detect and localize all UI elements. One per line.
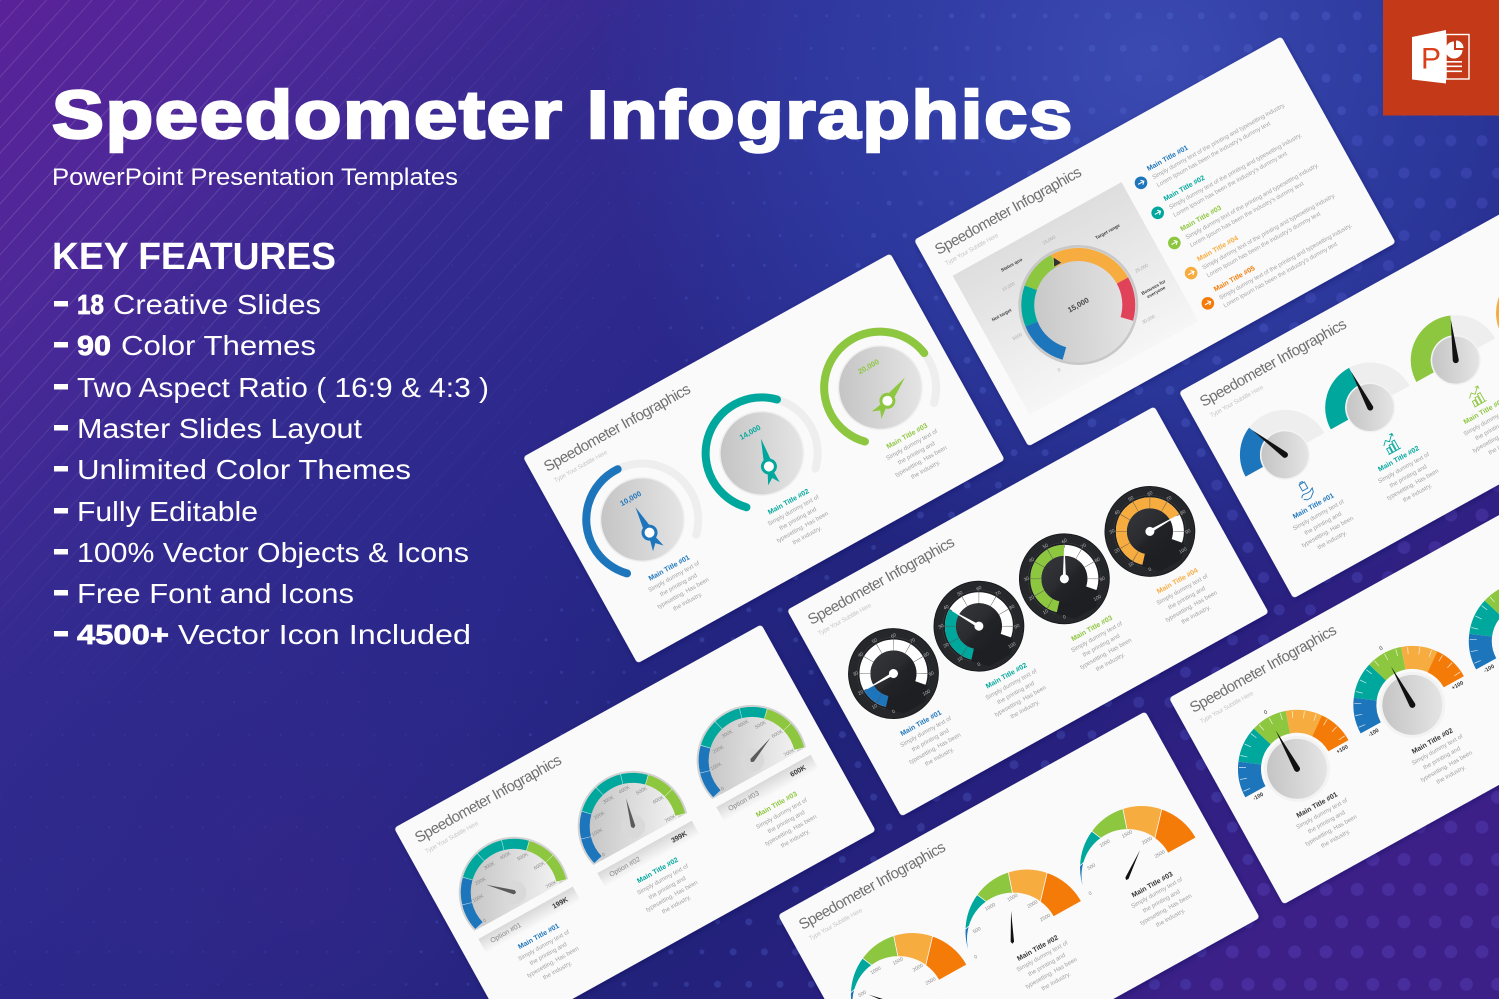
gauge 2 caption (631, 854, 704, 922)
dial 1: 60 (890, 632, 898, 640)
gauge 1 caption (1290, 788, 1363, 856)
gauge scale labels: 5000 (1012, 332, 1023, 341)
gauge 3 caption: the industry. (1155, 908, 1187, 929)
gauge 2 caption: Simply dummy text of (767, 494, 820, 528)
gauge 3: 400K (737, 718, 751, 730)
gauge 2: 1500 (1006, 893, 1019, 903)
gauge 2: 100K (591, 827, 604, 838)
gauge scale labels: Status quo (1000, 257, 1023, 273)
gauge 3 caption: typesetting. Has been (1139, 893, 1193, 927)
dial 3: 80 (1094, 556, 1102, 564)
dial 4: 80 (1179, 509, 1187, 517)
gauge 2 caption (1406, 724, 1478, 792)
gauge 3 caption: Simply dummy text of (755, 798, 809, 831)
dial 1 caption: the printing and (911, 728, 950, 753)
icon: powerpoint logo: P (1421, 42, 1441, 76)
feature: free font: Free Font and Icons (77, 578, 354, 609)
gauge 1 (1236, 404, 1333, 502)
dial 3: 10 (1042, 608, 1050, 616)
dial 1 caption (894, 707, 967, 774)
gauge 2: 14,000 (738, 423, 762, 442)
feature: unlimited colors: Unlimited Color Themes (77, 454, 411, 485)
dial 2: 80 (1008, 604, 1016, 612)
gauge 1 caption (1287, 489, 1359, 557)
gauge 1 caption: the printing and (529, 942, 568, 967)
gauge 3: 0 (1088, 890, 1093, 897)
dial 4 caption: Main Title #04 (1156, 567, 1199, 596)
feature: 18 creative slides: Creative Slides (113, 289, 321, 320)
dial 1 caption: Simply dummy text of (900, 716, 953, 749)
dial 1 caption: typesetting. Has been (908, 732, 962, 766)
gauge 2 caption: Simply dummy text of (1377, 452, 1431, 485)
dial 3: 20 (1028, 594, 1036, 602)
gauge 2 caption: Simply dummy text of (1411, 734, 1464, 767)
slide heading: Speedometer Infographics (796, 839, 949, 934)
gauge 3 caption: the industry. (910, 460, 942, 481)
gauge 2: -100 (1368, 728, 1380, 738)
gauge 3 caption (1125, 868, 1198, 935)
gauge 3 (1468, 589, 1499, 672)
gauge 1 caption: Main Title #01 (1296, 791, 1339, 820)
gauge 1: 100K (472, 893, 485, 904)
gauge scale labels: 30,000 (1141, 314, 1156, 325)
gauge 1 caption: the printing and (1307, 810, 1346, 835)
dial 3: 100 (1093, 594, 1103, 603)
gauge 1: 500 (857, 989, 868, 999)
panel: slide with fan gauges and icons, right (1179, 188, 1499, 598)
gauge 2 (1353, 646, 1464, 736)
dial 2 caption: typesetting. Has been (994, 685, 1048, 718)
gauge 2 caption: typesetting. Has been (1420, 750, 1474, 784)
powerpoint badge (1383, 0, 1499, 116)
dial 2 caption: Main Title #02 (985, 662, 1028, 690)
gauge scale labels: Not target (991, 307, 1013, 322)
dial 4: 70 (1165, 495, 1173, 503)
gauge 2 caption: typesetting. Has been (645, 880, 699, 913)
gauge 3 (1057, 783, 1198, 902)
gauge 3: Option #03 (727, 790, 761, 813)
gauge 2: 500 (972, 926, 982, 935)
gauge 3 caption: Simply dummy text of (1131, 877, 1184, 910)
gauge 1: 400K (499, 850, 513, 862)
gauge 2: 2000 (1026, 899, 1039, 910)
gauge scale labels: Target range (1094, 223, 1121, 240)
gauge 3: 100K (710, 761, 723, 772)
key features heading: KEY FEATURES (52, 236, 336, 278)
dial 2: 10 (956, 656, 964, 664)
icon: bar chart with arrow (1380, 433, 1401, 455)
dial 4 (1089, 470, 1211, 593)
dial 4: 50 (1127, 495, 1135, 503)
gauge 3 caption: the printing and (767, 810, 806, 835)
gauge 2 caption: Main Title #02 (1016, 935, 1060, 963)
gauge 3 (772, 280, 988, 495)
dial 1: 20 (857, 689, 865, 697)
gauge 2: 0 (601, 852, 607, 858)
gauge 3 caption: Main Title #03 (1131, 871, 1174, 899)
dial 4: 30 (1108, 528, 1116, 536)
dial 4 caption: Simply dummy text of (1156, 574, 1209, 607)
dial 3: 30 (1023, 575, 1031, 583)
slide subtitle: Type Your Subtitle Here (944, 232, 1000, 267)
list item 1: Main Title #01 (1146, 145, 1190, 173)
gauge 3 caption: Main Title #03 (755, 791, 799, 819)
gauge 3 caption: typesetting. Has been (895, 445, 948, 479)
gauge 3: 2500 (1154, 849, 1166, 860)
gauge 2 caption: the printing and (1028, 953, 1067, 978)
gauge 2 caption: the industry. (792, 525, 823, 546)
panel: slide with semicircle dials, bottom left (394, 624, 876, 999)
gauge scale labels: 0 (1057, 367, 1062, 373)
gauge 2: 500K (635, 785, 649, 797)
dial 3 caption: Main Title #03 (1070, 615, 1114, 643)
list item 3: Main Title #03 (1179, 205, 1223, 233)
gauge 1: 0 (482, 918, 488, 924)
gauge 3: 700K (783, 747, 796, 759)
dial 4: 90 (1184, 528, 1192, 536)
dial 4: 0 (1148, 566, 1153, 573)
list item 1: Simply dummy text of the printing and typesetting industry. (1152, 102, 1287, 181)
gauge 2 caption: Simply dummy text of (1016, 940, 1069, 974)
gauge 2 caption: Simply dummy text of (636, 863, 690, 897)
slide heading: Speedometer Infographics (541, 381, 694, 476)
feature: master slides: Master Slides Layout (77, 413, 362, 444)
gauge 2: 0 (1379, 646, 1384, 652)
gauge 1 caption: the industry. (542, 960, 574, 981)
key features list (54, 289, 489, 650)
gauge 2 (654, 346, 869, 561)
gauge 1: 300K (483, 860, 497, 872)
dial 4: 100 (1178, 546, 1188, 556)
dial 4: 20 (1114, 547, 1121, 555)
gauge 1: 10,000 (618, 489, 643, 508)
slide subtitle: Type Your Subtitle Here (817, 602, 873, 637)
gauge 1: 2500 (925, 976, 937, 987)
gauge 2 caption: typesetting. Has been (1025, 957, 1079, 990)
gauge 1 (828, 910, 969, 999)
gauge 1: 199K (551, 896, 570, 911)
list item 5: Simply dummy text of the printing and typesetting industry. (1218, 223, 1354, 302)
list item 4: Simply dummy text of the printing and typesetting industry. (1202, 193, 1337, 271)
list item 3: Simply dummy text of the printing and typesetting industry. (1185, 163, 1320, 241)
dial 3 caption: typesetting. Has been (1079, 638, 1133, 671)
gauge 2: 1000 (984, 902, 997, 913)
gauge 1 caption: Simply dummy text of (1292, 499, 1346, 532)
gauge 1 caption: typesetting. Has been (1305, 814, 1358, 848)
dial 3: 50 (1042, 542, 1050, 550)
dial 3: 40 (1028, 556, 1036, 564)
list item 4 (1180, 184, 1341, 288)
dial 4 caption: the industry. (1181, 605, 1212, 626)
gauge 3 caption (750, 788, 823, 856)
gauge 3 caption: the printing and (1142, 889, 1181, 914)
list item 2: Simply dummy text of the printing and typesetting industry. (1168, 132, 1304, 211)
list item 4: Lorem Ipsum has been the industry's dummy text (1206, 211, 1322, 279)
dial 2: 60 (975, 585, 983, 593)
dial 3 caption (1065, 612, 1138, 679)
gauge 1 (1238, 710, 1348, 800)
dial 2: 30 (937, 623, 945, 631)
dial 1: 0 (891, 709, 897, 715)
feature: aspect ratio: Two Aspect Ratio ( 16:9 & 4:3 ) (77, 372, 489, 403)
panel: slide with crescent gauges, bottom centre (778, 711, 1260, 999)
slide heading: Speedometer Infographics (1197, 316, 1350, 411)
slide subtitle: Type Your Subtitle Here (1199, 690, 1255, 725)
gauge 1 caption: Main Title #01 (648, 554, 691, 583)
gauge 1 caption: the printing and (659, 573, 698, 598)
gauge 1: 200K (474, 876, 488, 887)
gauge 1 caption: Simply dummy text of (648, 561, 701, 594)
dial 4: 40 (1113, 509, 1121, 517)
dial 2: 40 (942, 604, 950, 612)
gauge 2: 0 (973, 954, 979, 961)
subtitle: PowerPoint Presentation Templates (52, 164, 458, 191)
gauge 1 (458, 836, 578, 950)
gauge 3: 500 (1087, 862, 1097, 872)
gauge 2: 200K (593, 810, 607, 821)
gauge 3: 0 (720, 786, 726, 793)
gauge 1 caption (512, 920, 585, 988)
dial 4: 60 (1146, 490, 1154, 498)
gauge 2: 600K (652, 794, 666, 806)
gauge 1 caption: typesetting. Has been (526, 946, 580, 979)
dial 3 caption: the industry. (1095, 652, 1127, 673)
dial 1: 100 (922, 688, 932, 698)
dial 2 caption: the printing and (997, 681, 1036, 706)
slide subtitle: Type Your Subtitle Here (808, 907, 864, 942)
gauge 1 (535, 412, 750, 627)
panel: slide with dark dial gauges (787, 406, 1269, 816)
feature: vector icons: Vector Icon Included (178, 619, 471, 650)
gauge 2 caption: the industry. (1402, 483, 1434, 504)
panel: slide with multi-colour half gauges, right (1169, 494, 1499, 904)
slide heading: Speedometer Infographics (412, 752, 565, 847)
gauge 2 caption (1372, 442, 1445, 510)
feature: vector objects: 100% Vector Objects & Icons (77, 537, 469, 568)
dial 2: 20 (943, 642, 950, 650)
gauge 3: 600K (789, 765, 807, 779)
dial 3 (1003, 518, 1126, 640)
gauge 1: -100 (1252, 792, 1265, 802)
gauge 1 caption: the printing and (1304, 511, 1343, 537)
gauge 2 caption (1011, 932, 1083, 999)
dial 2 caption: Simply dummy text of (985, 668, 1038, 702)
dial 1: 90 (928, 670, 936, 678)
gauge 3: 20,000 (856, 357, 881, 376)
gauge 2 (1320, 355, 1418, 455)
feature: fully editable: Fully Editable (77, 496, 258, 527)
gauge 2 caption: the industry. (1041, 971, 1072, 992)
slide heading: Speedometer Infographics (932, 164, 1085, 259)
icon: hand holding box (1295, 479, 1316, 502)
gauge 2 caption: Main Title #02 (1377, 445, 1421, 473)
gauge 3: 1500 (1121, 829, 1134, 840)
gauge 2: 300K (602, 794, 616, 806)
gauge 2 caption: the printing and (648, 876, 687, 901)
gauge 1 caption: the industry. (1317, 530, 1348, 551)
gauge 2 caption (762, 485, 834, 553)
gauge 2 caption: the printing and (779, 507, 818, 532)
gauge 3 caption: Main Title #03 (886, 422, 929, 451)
panel: slide with large gauge and list, top right (914, 36, 1396, 446)
gauge 3 caption (880, 419, 953, 487)
gauge 1: 500K (516, 851, 530, 863)
gauge 3 caption (1457, 395, 1499, 463)
gauge 1 caption: the industry. (673, 592, 704, 613)
list item 3 (1163, 153, 1325, 258)
gauge scale labels: everyone (1146, 285, 1167, 299)
feature: 90 color themes: 90 (77, 330, 111, 361)
dial 4 caption: typesetting. Has been (1165, 590, 1219, 624)
dial 2 caption: the industry. (1010, 699, 1041, 720)
slide subtitle: Type Your Subtitle Here (553, 449, 609, 484)
dial 2: 0 (977, 661, 982, 668)
gauge 2: 700K (664, 813, 677, 825)
gauge 1: 1000 (870, 965, 882, 976)
gauge 3 caption: typesetting. Has been (764, 814, 818, 848)
dial 2 (918, 565, 1040, 687)
gauge 2 (943, 847, 1084, 965)
gauge 1: 2000 (912, 963, 925, 973)
main title: Speedometer Infographics (52, 77, 1074, 153)
panel: slide with round arc gauges (518, 251, 1009, 666)
list item 5: Lorem Ipsum has been the industry's dummy text (1223, 241, 1339, 309)
feature: 90 color themes (54, 330, 316, 361)
gauge 3: -100 (1483, 664, 1496, 674)
gauge 3 (1406, 309, 1499, 408)
gauge 3 caption: Simply dummy text of (886, 429, 939, 462)
dial 2: 90 (1013, 623, 1021, 631)
dial 2: 50 (956, 590, 964, 598)
gauge 1 caption: the industry. (1320, 829, 1352, 850)
gauge 1: +100 (1336, 744, 1349, 756)
gauge scale labels: Bonuses for (1141, 279, 1167, 296)
gauge 3: 500K (754, 719, 768, 731)
gauge 2: Option #02 (608, 856, 642, 879)
gauge 1 caption: typesetting. Has been (657, 577, 710, 611)
gauge scale labels (970, 198, 1179, 389)
gauge 1 caption: Simply dummy text of (518, 929, 571, 963)
list item 5 (1197, 214, 1358, 319)
dial 1: 30 (852, 670, 860, 678)
gauge 3: 200K (712, 744, 726, 755)
dial 1 (832, 612, 955, 735)
list item 1 (1130, 93, 1291, 198)
gauge 3: 1000 (1099, 838, 1112, 849)
dial 1 caption: the industry. (924, 747, 956, 768)
feature: 90 color themes: Color Themes (121, 330, 316, 361)
dial 1: 70 (909, 637, 917, 645)
large gauge: 15,000 (1066, 295, 1091, 314)
gauge 1 caption: Main Title #01 (1292, 492, 1335, 521)
gauge 1 caption (642, 551, 715, 619)
gauge 2: +100 (1451, 680, 1465, 692)
dial 3: 90 (1099, 575, 1107, 583)
large gauge (981, 208, 1175, 402)
gauge 1: 600K (533, 860, 547, 872)
gauge 3 caption: the printing and (897, 441, 936, 466)
dial 4: 10 (1127, 561, 1135, 569)
gauge 2 caption: Main Title #02 (767, 488, 811, 516)
list item 2 (1147, 123, 1308, 228)
gauge scale labels: 25,000 (1134, 262, 1149, 274)
dial 3 caption: Simply dummy text of (1070, 621, 1124, 654)
gauge 2 caption: the industry. (661, 894, 693, 915)
dial 4 caption (1151, 564, 1223, 632)
dial 4 caption: the printing and (1168, 586, 1207, 611)
feature: vector icons: 4500+ (77, 619, 169, 650)
icon: growth chart (1466, 386, 1487, 407)
gauge 1: 700K (545, 879, 559, 891)
dial 1 caption: Main Title #01 (900, 709, 943, 738)
gauge 2: 400K (618, 784, 632, 796)
gauge 1: 1500 (892, 956, 905, 967)
gauge 2 caption: Main Title #02 (636, 857, 680, 885)
slide heading: Speedometer Infographics (1187, 622, 1340, 717)
gauge 1 caption: Simply dummy text of (1296, 798, 1349, 831)
gauge 3: 300K (721, 729, 735, 740)
gauge 4 (1493, 265, 1499, 360)
gauge 1 caption: typesetting. Has been (1301, 516, 1355, 549)
gauge 2: 2500 (1039, 913, 1052, 923)
dial 1: 40 (857, 651, 865, 659)
gauge 2 caption: the printing and (1423, 746, 1462, 771)
dial 3 caption: the printing and (1082, 633, 1121, 659)
dial 1: 50 (871, 637, 879, 645)
gauge 2 (578, 770, 698, 884)
gauge 2 caption: Main Title #02 (1411, 727, 1455, 756)
slide heading: Speedometer Infographics (805, 534, 958, 629)
list item 1: Lorem Ipsum has been the industry's dummy text (1156, 121, 1272, 189)
gauge 2 caption: typesetting. Has been (776, 511, 830, 544)
dial 2: 70 (994, 590, 1002, 598)
grey chart panel (953, 182, 1199, 415)
gauge scale labels: 15,000 (1042, 234, 1057, 246)
feature: vector icons (54, 619, 471, 650)
gauge 2 caption: typesetting. Has been (1386, 468, 1440, 502)
gauge scale labels: 10,000 (1001, 281, 1016, 292)
list item 3: Lorem Ipsum has been the industry's dummy text (1189, 181, 1305, 249)
slide subtitle: Type Your Subtitle Here (1209, 384, 1265, 419)
dial 1: 10 (871, 703, 879, 711)
gauge 1: Option #01 (489, 922, 523, 945)
gauge 2 caption: the industry. (1436, 765, 1467, 786)
list item 2: Main Title #02 (1163, 175, 1206, 203)
gauge 3: 2000 (1141, 836, 1154, 846)
dial 1: 80 (923, 651, 931, 659)
dial 3: 60 (1061, 537, 1069, 545)
gauge 3 (696, 704, 816, 818)
list item 5: Main Title #05 (1213, 265, 1256, 293)
gauge 1 caption: Main Title #01 (517, 923, 561, 951)
gauge 2: 399K (670, 830, 688, 845)
gauge 2 caption: the printing and (1389, 464, 1428, 489)
dial 2 caption (980, 659, 1052, 727)
list item 2: Lorem Ipsum has been the industry's dummy text (1173, 151, 1289, 219)
gauge 1: 0 (1263, 709, 1269, 716)
slide subtitle: Type Your Subtitle Here (424, 820, 480, 855)
dial 2: 100 (1007, 641, 1017, 650)
dial 3: 70 (1080, 542, 1088, 550)
list item 4: Main Title #04 (1196, 235, 1240, 263)
feature: 18 creative slides: 18 (77, 289, 104, 320)
gauge 3: 600K (771, 728, 785, 740)
gauge 3 caption: the industry. (780, 829, 812, 850)
dial 3: 0 (1062, 614, 1068, 621)
